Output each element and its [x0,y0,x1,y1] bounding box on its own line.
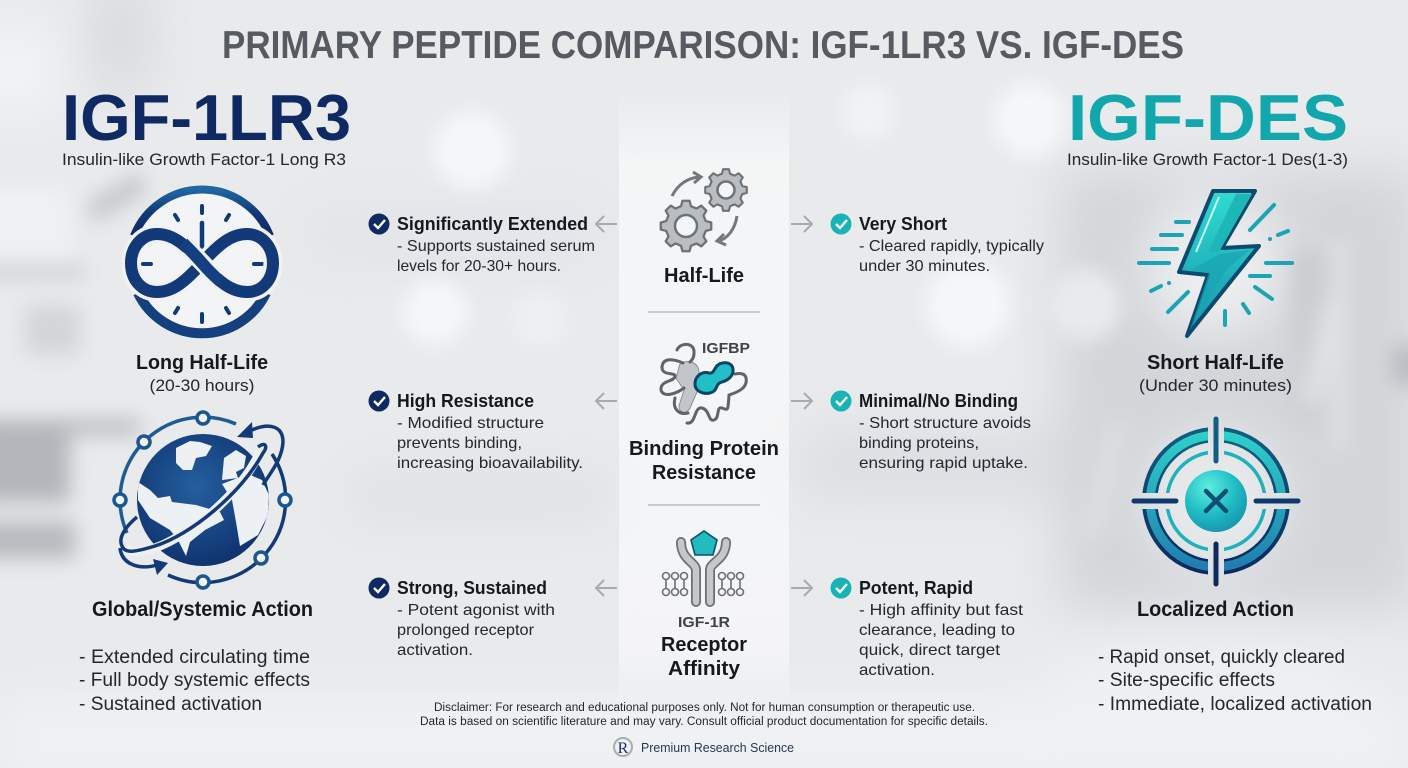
heading: IGF-1LR3: IGF-1LR3 [62,81,351,154]
row 2 right: binding of IGF-DES: ensuring rapid uptake. [859,455,1028,472]
row 2 right: binding of IGF-DES: Minimal/No Binding [859,391,1018,411]
row 2 right: binding of IGF-DES: - Short structure avoids [859,415,1031,432]
row 3 right: receptor affinity of IGF-DES: quick, direct target [859,642,1001,659]
row 1 right: half-life of IGF-DES: - Cleared rapidly, typically [859,238,1044,255]
icon: binding protein with IGFBP label [661,340,750,423]
label: Binding Protein Resistance [629,438,779,484]
heading: IGF-1LR3: Insulin-like Growth Factor-1 Long R3 [62,151,346,169]
row 2 left: binding resistance of IGF-1LR3: - Modified structure [397,415,544,432]
arrow: right pointers [791,216,812,596]
row 2 left: binding resistance of IGF-1LR3: prevents binding, [397,435,522,452]
row 3 right: receptor affinity of IGF-DES: activation. [859,662,935,679]
row 1 left: half-life of IGF-1LR3: levels for 20-30+ hours. [397,258,561,275]
text: Localized Action: Localized Action [1137,598,1294,621]
row 3 right: receptor affinity of IGF-DES: - High affinity but fast [859,602,1024,619]
panel: center comparison column [619,90,789,710]
row 2 left: binding resistance of IGF-1LR3: increasing bioavailability. [397,455,583,472]
text: Long Half-Life: (20-30 hours) [150,376,254,395]
row 1 right: half-life of IGF-DES [830,214,1044,275]
list: IGF-DES effects: - Rapid onset, quickly cleared [1098,647,1345,668]
label: Binding Protein Resistance: Resistance [652,462,756,484]
list: IGF-DES effects: - Immediate, localized activation [1098,694,1372,715]
list: IGF-DES effects: - Site-specific effects [1098,670,1275,691]
icon: IGF-1R receptor [662,531,744,602]
heading: IGF-DES: Insulin-like Growth Factor-1 Des(1-3) [1067,151,1348,169]
row 3 left: receptor affinity of IGF-1LR3: - Potent agonist with [397,602,555,619]
label: IGF-1R Receptor Affinity: Receptor [661,634,747,656]
text: Short Half-Life: Short Half-Life [1147,352,1284,374]
list: IGF-1LR3 effects: - Full body systemic effects [79,670,310,691]
list: IGF-1LR3 effects [79,647,310,715]
disclaimer [420,702,988,728]
row 3 right: receptor affinity of IGF-DES: Potent, Rapid [859,578,973,598]
icon: globe with orbits [114,412,291,588]
row 1 left: half-life of IGF-1LR3: Significantly Extended [397,214,588,234]
list: IGF-1LR3 effects: - Sustained activation [79,694,262,715]
row 1 left: half-life of IGF-1LR3 [368,214,595,275]
disclaimer: Data is based on scientific literature and may vary. Consult official product documentation for specific details. [420,716,988,728]
row 3 right: receptor affinity of IGF-DES [830,578,1024,679]
row 3 left: receptor affinity of IGF-1LR3: activation. [397,642,473,659]
row 1 right: half-life of IGF-DES: Very Short [859,214,947,234]
text: Long Half-Life: Long Half-Life [136,352,268,374]
row 3 right: receptor affinity of IGF-DES: clearance, leading to [859,622,1015,639]
row 2 left: binding resistance of IGF-1LR3: High Resistance [397,391,534,411]
list: IGF-1LR3 effects: - Extended circulating time [79,647,310,668]
text: Short Half-Life: (Under 30 minutes) [1139,376,1292,395]
row 2 left: binding resistance of IGF-1LR3 [368,390,583,472]
icon: target with particle [1134,419,1298,584]
label: Half-Life: Half-Life [664,265,744,287]
logo: Premium Research Science [614,738,794,757]
title: PRIMARY PEPTIDE COMPARISON: IGF-1LR3 VS. IGF-DES [222,24,1184,67]
label: Binding Protein Resistance: Binding Protein [629,438,779,460]
row 3 left: receptor affinity of IGF-1LR3 [368,578,555,659]
arrow: left pointers [596,216,617,596]
icon: infinity clock [131,190,273,333]
icon: binding protein with IGFBP label: IGFBP [702,340,750,357]
text: Short Half-Life [1139,352,1292,395]
text: Global/Systemic Action: Global/Systemic Action [92,598,313,621]
row 2 right: binding of IGF-DES [830,390,1031,472]
logo: Premium Research Science: Premium Research Science [641,741,794,755]
divider lines [648,312,760,505]
list: IGF-DES effects [1098,647,1372,715]
label: IGF-1R Receptor Affinity [661,614,747,680]
label: IGF-1R Receptor Affinity: Affinity [668,658,741,680]
logo: Premium Research Science: R [618,740,629,757]
label: IGF-1R Receptor Affinity: IGF-1R [678,614,730,631]
text: Long Half-Life [136,352,268,395]
icon: gears [661,169,747,251]
icon: lightning bolt [1139,191,1292,336]
row 3 left: receptor affinity of IGF-1LR3: Strong, Sustained [397,578,547,598]
disclaimer: Disclaimer: For research and educational purposes only. Not for human consumption or therapeutic use. [434,702,975,714]
row 1 right: half-life of IGF-DES: under 30 minutes. [859,258,990,275]
row 1 left: half-life of IGF-1LR3: - Supports sustained serum [397,238,595,255]
heading: IGF-DES: IGF-DES [1068,81,1348,154]
row 2 right: binding of IGF-DES: binding proteins, [859,435,979,452]
row 3 left: receptor affinity of IGF-1LR3: prolonged receptor [397,622,535,639]
